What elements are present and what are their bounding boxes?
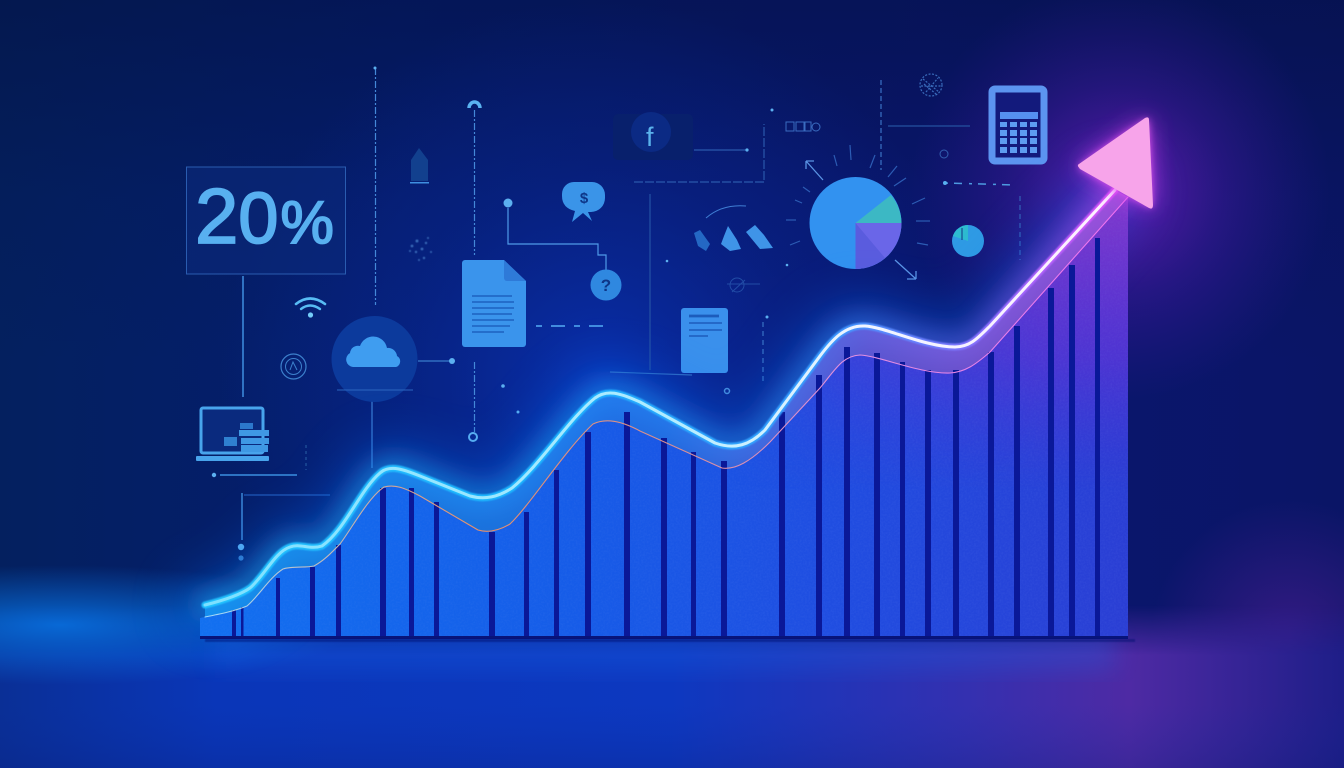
icon: padlock arch bbox=[469, 102, 480, 108]
chart glow halo bbox=[205, 190, 1115, 605]
icon: laptop with books bbox=[196, 408, 269, 461]
icon: question circle bbox=[590, 270, 622, 300]
icon: small pie bbox=[952, 225, 984, 257]
icon: mesh globe bbox=[920, 74, 942, 96]
icon: wifi bbox=[296, 298, 325, 318]
icon: dash-dot link bbox=[940, 150, 1016, 185]
icon: info book: f bbox=[646, 122, 654, 152]
neon growth line bbox=[205, 190, 1128, 617]
dashed connector lines bbox=[220, 68, 1020, 540]
translucent band beneath the neon line bbox=[205, 190, 1128, 630]
neon bright core bbox=[205, 190, 1115, 605]
bar gaps bbox=[232, 238, 1100, 638]
icon: calculator bbox=[992, 89, 1044, 161]
icon: document bbox=[462, 260, 526, 347]
icon: report document bbox=[681, 308, 728, 373]
icon: small chain glyph bbox=[786, 122, 820, 131]
icon: question circle: ? bbox=[601, 276, 611, 295]
neon outer stroke bbox=[205, 190, 1115, 605]
icon: info book bbox=[613, 112, 693, 160]
percentage card: 20% bbox=[186, 167, 346, 397]
icon: circled badge bbox=[281, 354, 306, 379]
reflective floor bbox=[0, 570, 1344, 768]
percentage card: 20%: 20% bbox=[195, 172, 334, 260]
base shadow line bbox=[205, 639, 1135, 642]
floor reflection bbox=[215, 630, 1115, 670]
small nodes bbox=[212, 66, 788, 561]
thin contour line on bar tops bbox=[205, 197, 1128, 617]
icon: upload arrow bbox=[410, 148, 429, 184]
icon: faint circuit bbox=[727, 278, 760, 292]
pie chart with rays bbox=[786, 145, 930, 279]
icon: cloud in circle bbox=[332, 316, 418, 402]
icon: dollar speech bubble bbox=[562, 182, 605, 222]
arrow head bbox=[1078, 117, 1153, 209]
icon: hands / tags group bbox=[694, 206, 773, 251]
icon: dollar speech bubble: $ bbox=[580, 190, 589, 207]
icon: scatter dots bbox=[409, 237, 432, 261]
bar chart bbox=[200, 190, 1130, 640]
